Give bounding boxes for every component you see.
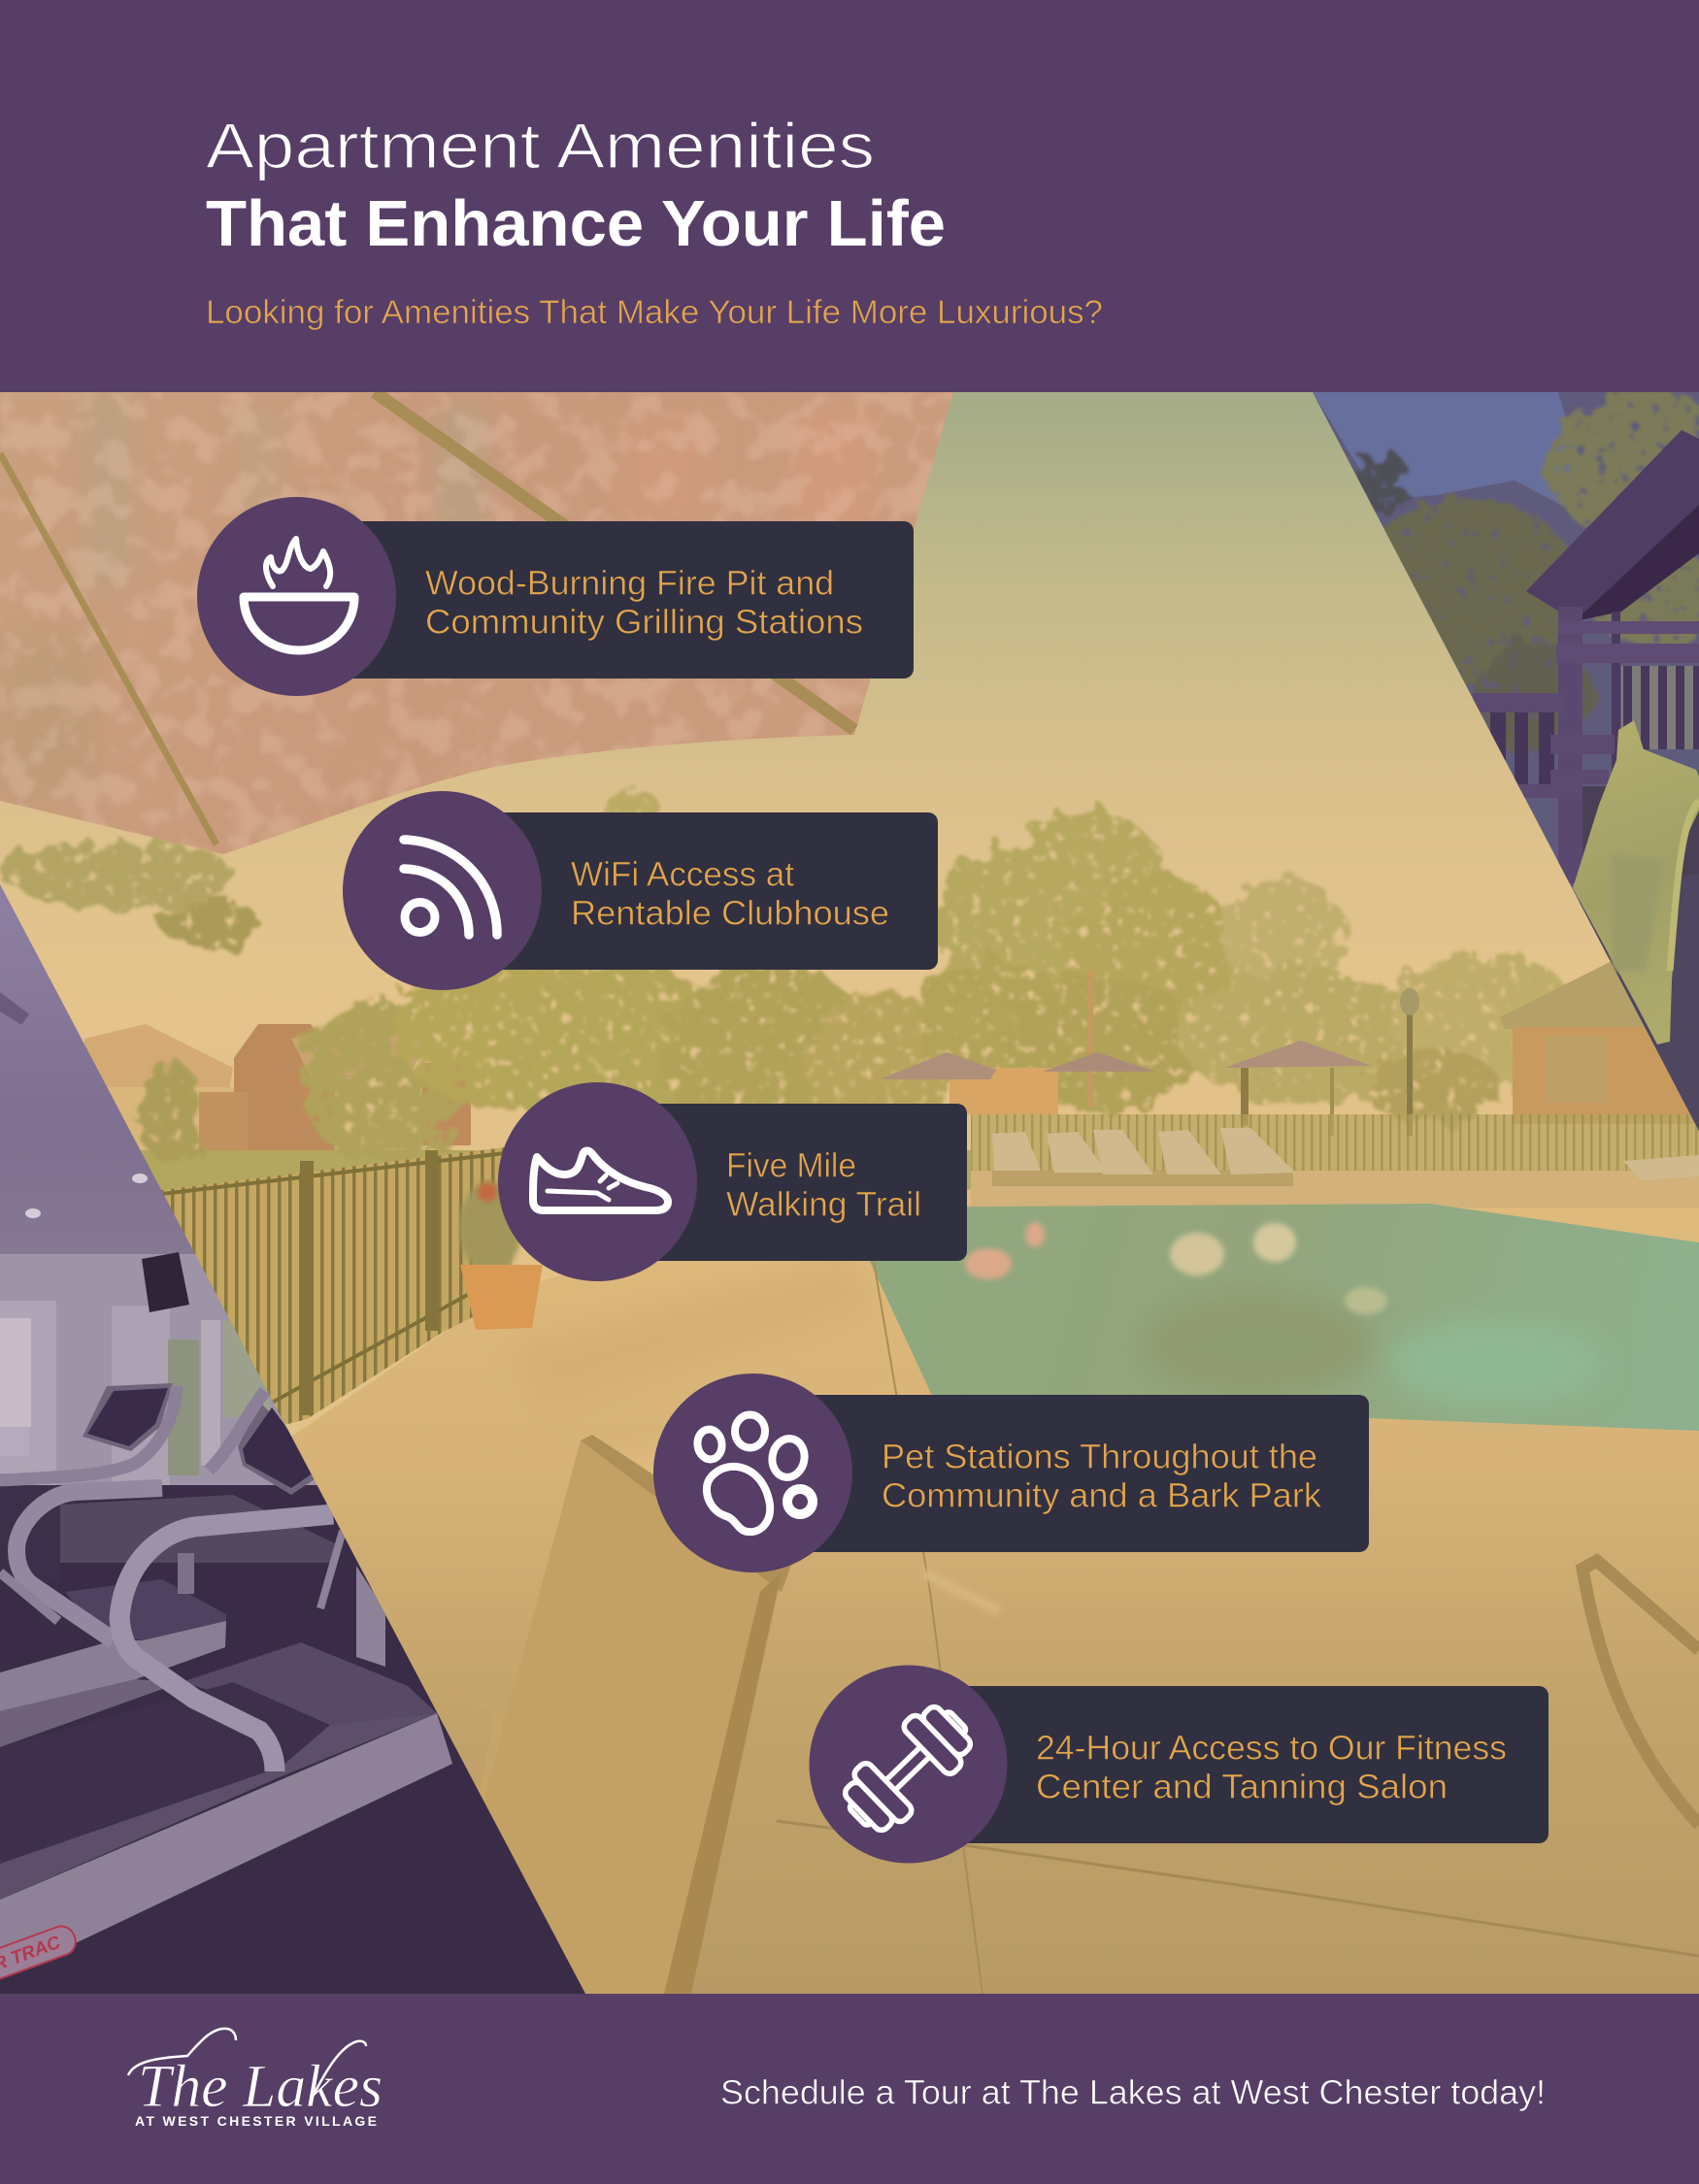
treadmill brand xyxy=(0,1923,80,1983)
icon: fire bowl xyxy=(244,539,354,650)
title line 2: That Enhance Your Life xyxy=(206,187,946,260)
label: fitness center: 24-Hour Access to Our Fitness xyxy=(1036,1730,1507,1767)
label: wifi xyxy=(571,856,889,932)
icon: wifi xyxy=(404,840,497,935)
call to action: Schedule a Tour at The Lakes at West Chester today! xyxy=(720,2073,1546,2112)
label: fire pit xyxy=(425,565,863,641)
brick clubhouse xyxy=(1500,961,1695,1124)
icon: sneaker xyxy=(533,1151,668,1210)
title line 1: Apartment Amenities xyxy=(206,110,875,182)
gym walls and windows xyxy=(0,1254,323,1497)
treadmill consoles xyxy=(83,1383,173,1451)
label: walking trail: Five Mile xyxy=(726,1147,856,1184)
label: fitness center: Center and Tanning Salon xyxy=(1036,1769,1448,1805)
label: pet stations: Pet Stations Throughout the xyxy=(882,1439,1317,1475)
label: wifi: Rentable Clubhouse xyxy=(571,895,889,932)
label: wifi: WiFi Access at xyxy=(571,856,794,893)
logo: The Lakes xyxy=(128,2029,383,2129)
amenity 5: fitness center xyxy=(810,1666,1549,1864)
left iron fence and planter xyxy=(146,1147,543,1427)
ground and deck xyxy=(291,1189,1699,1994)
logo: The Lakes: AT WEST CHESTER VILLAGE xyxy=(135,2113,377,2129)
subtitle: Looking for Amenities That Make Your Life More Luxurious? xyxy=(206,294,1103,331)
amenity 1: fire pit xyxy=(197,497,914,696)
label: fire pit: Wood-Burning Fire Pit and xyxy=(425,565,834,602)
label: walking trail: Walking Trail xyxy=(726,1186,921,1223)
wall TV xyxy=(142,1252,189,1312)
logo: The Lakes: The Lakes xyxy=(138,2054,383,2120)
lounge chairs xyxy=(992,1128,1699,1186)
label: fire pit: Community Grilling Stations xyxy=(425,604,863,641)
patio umbrellas and lamp post xyxy=(880,971,1419,1136)
right chair frame xyxy=(1582,1561,1699,1825)
icon: dumbbell xyxy=(833,1695,983,1842)
deck shadows and cracks xyxy=(505,1252,1699,1994)
pool scene photo xyxy=(0,392,1699,1994)
treadmill legs and posts xyxy=(356,1566,385,1667)
far fence xyxy=(971,1114,1699,1171)
label: pet stations: Community and a Bark Park xyxy=(882,1477,1322,1514)
distant houses and lawn xyxy=(84,1024,971,1190)
gym photo xyxy=(0,884,602,2000)
floor and treadmills xyxy=(0,1383,602,2000)
header band xyxy=(0,0,1699,392)
swimming pool xyxy=(845,1204,1699,1431)
label: pet stations xyxy=(882,1439,1322,1514)
label: walking trail xyxy=(726,1147,921,1223)
icon: paw xyxy=(695,1415,813,1532)
yellow slide xyxy=(1573,720,1699,1044)
photo collage background xyxy=(0,388,1699,2000)
amenity 3: walking trail xyxy=(498,1082,967,1281)
amenity 2: wifi xyxy=(343,791,938,990)
large lounge chair xyxy=(515,1435,791,1994)
footer band xyxy=(0,1994,1699,2184)
playground photo xyxy=(1313,388,1699,1140)
label: fitness center xyxy=(1036,1730,1507,1805)
ground under slide xyxy=(1573,874,1699,1136)
umbrella canopy xyxy=(0,392,961,858)
handlebars xyxy=(0,1386,177,1480)
amenity 4: pet stations xyxy=(653,1373,1369,1572)
play structure xyxy=(1473,430,1699,903)
tree line xyxy=(0,786,1578,1165)
ceiling vent and lights xyxy=(0,992,29,1025)
